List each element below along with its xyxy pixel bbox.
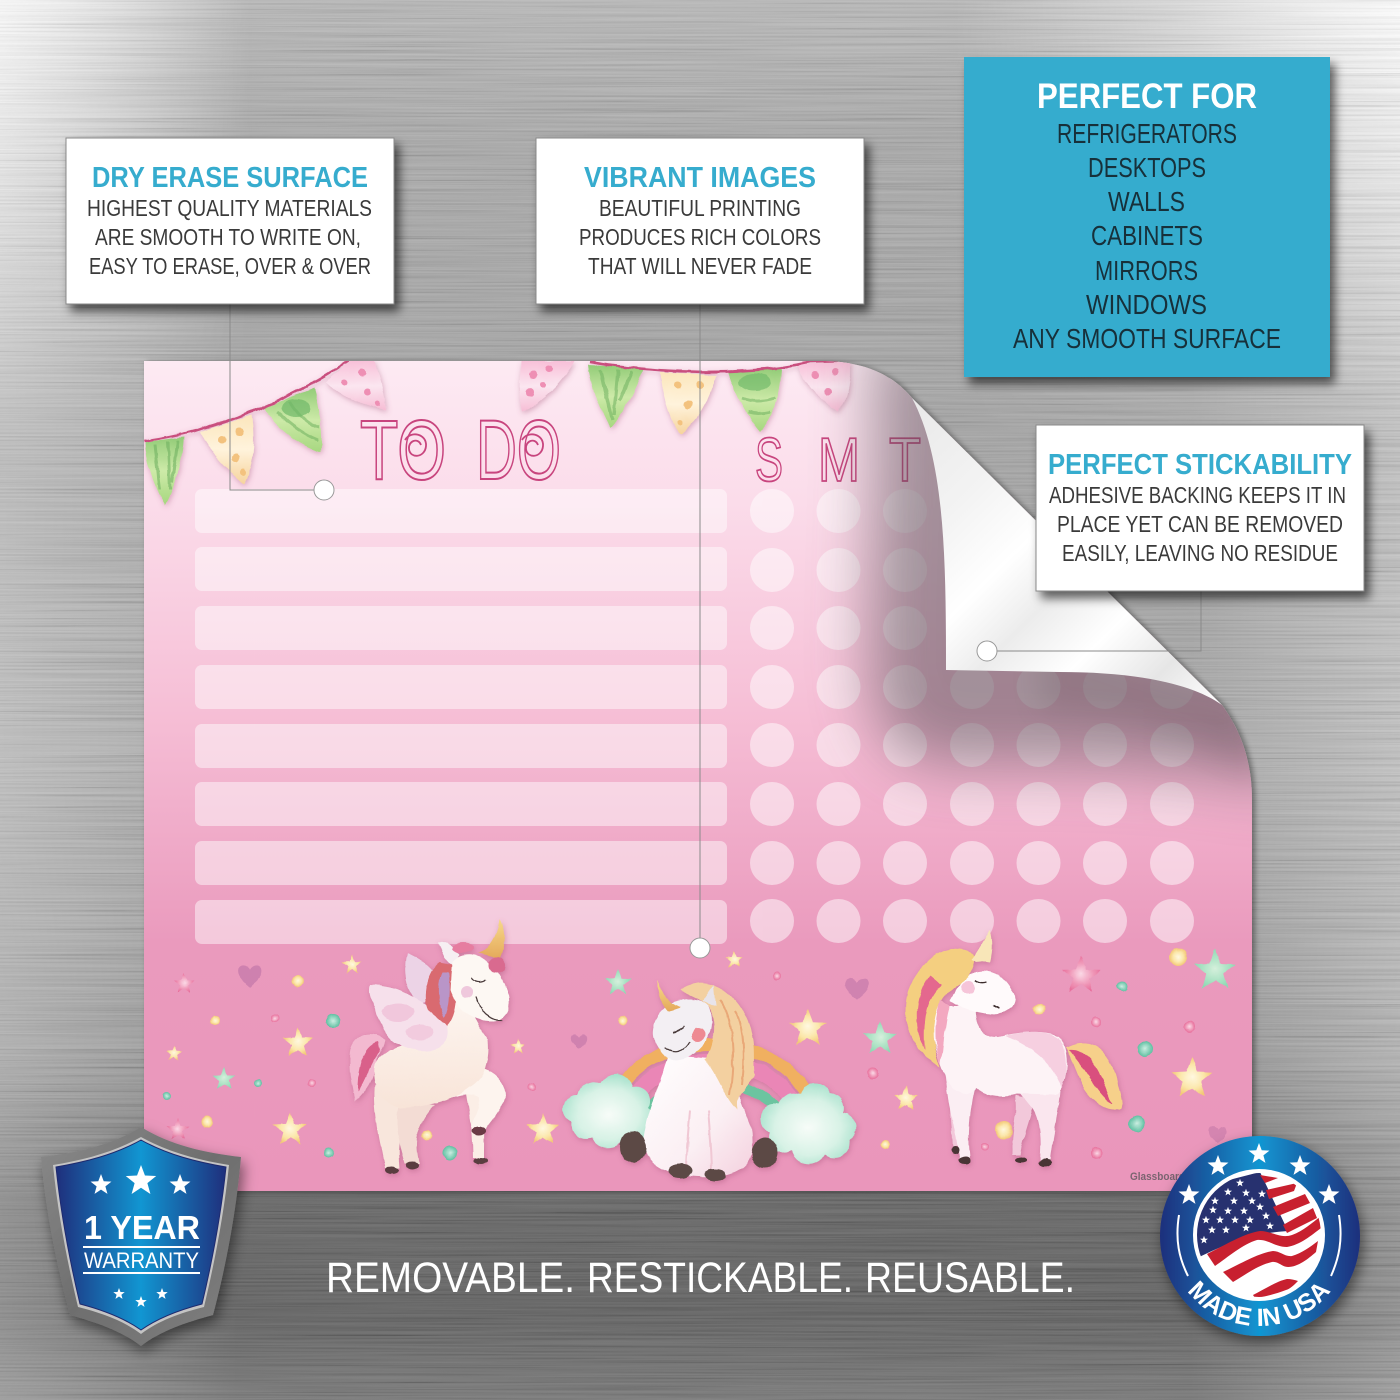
weekday headers: S bbox=[755, 426, 783, 495]
horn bbox=[657, 980, 680, 1012]
rim stars bbox=[1179, 1143, 1339, 1204]
callout body bbox=[579, 195, 821, 279]
callout body bbox=[87, 195, 372, 279]
unicorn: sitting with rainbow bbox=[563, 980, 856, 1181]
callout body: PLACE YET CAN BE REMOVED bbox=[1057, 511, 1343, 537]
near wing bbox=[369, 985, 448, 1051]
rim arcs bbox=[1177, 1215, 1341, 1276]
weekday headers bbox=[755, 426, 921, 495]
tagline: REMOVABLE. bbox=[326, 1254, 575, 1302]
legs bbox=[950, 1090, 958, 1148]
marker dot bbox=[690, 938, 710, 958]
tagline: REUSABLE. bbox=[865, 1254, 1075, 1302]
face bbox=[961, 981, 975, 995]
far wing bbox=[405, 953, 442, 1005]
horn bbox=[972, 930, 992, 963]
panel: perfect for bbox=[964, 57, 1330, 377]
badge: made in usa bbox=[1156, 1133, 1371, 1350]
unicorn: winged bbox=[349, 920, 510, 1174]
tagline: RESTICKABLE. bbox=[587, 1254, 853, 1302]
body and neck bbox=[374, 980, 488, 1108]
warranty text: WARRANTY bbox=[84, 1248, 199, 1273]
leader line: vibrant images bbox=[699, 304, 701, 948]
warranty text: 1 YEAR bbox=[84, 1209, 200, 1246]
surface list: WALLS bbox=[1108, 186, 1185, 217]
mane bbox=[425, 962, 457, 1026]
head bbox=[950, 971, 1015, 1014]
ear bbox=[703, 985, 716, 1007]
callout body: THAT WILL NEVER FADE bbox=[588, 253, 812, 279]
face bbox=[461, 986, 473, 998]
marker dot bbox=[314, 480, 334, 500]
curved label path bbox=[1168, 1235, 1350, 1326]
bunting banners bbox=[144, 361, 850, 505]
mane bbox=[906, 949, 975, 1067]
body bbox=[644, 1055, 753, 1177]
callout heading: VIBRANT IMAGES bbox=[584, 162, 816, 194]
shield silver edge bbox=[53, 1137, 229, 1334]
callout body: PRODUCES RICH COLORS bbox=[579, 224, 821, 250]
callout body bbox=[1049, 482, 1346, 566]
leader line: stickability bbox=[987, 591, 1201, 651]
head bbox=[450, 955, 510, 1021]
left cloud bbox=[563, 1074, 654, 1148]
heading: to do: TO bbox=[360, 403, 446, 497]
callout body: ARE SMOOTH TO WRITE ON, bbox=[95, 224, 361, 250]
surface list: DESKTOPS bbox=[1088, 152, 1206, 183]
tail bbox=[349, 1034, 386, 1101]
callout heading: DRY ERASE SURFACE bbox=[92, 162, 368, 194]
weekday headers: M bbox=[818, 426, 860, 495]
marker dot bbox=[977, 641, 997, 661]
sheet base bbox=[144, 361, 1252, 1191]
surface list: ANY SMOOTH SURFACE bbox=[1013, 323, 1281, 354]
hooves bbox=[620, 1131, 646, 1163]
surface list: MIRRORS bbox=[1095, 255, 1198, 286]
hooves bbox=[959, 1156, 971, 1164]
surface list bbox=[1013, 118, 1281, 354]
maker mark: Glassboard bbox=[1130, 1171, 1185, 1183]
shield frame bbox=[41, 1127, 241, 1346]
hooves bbox=[385, 1166, 399, 1174]
body and neck bbox=[932, 1005, 1067, 1096]
to do rows bbox=[195, 489, 727, 944]
peel shadow bbox=[870, 340, 1290, 790]
badge disc bbox=[1160, 1136, 1360, 1336]
surface list: WINDOWS bbox=[1086, 289, 1207, 320]
callout body: EASY TO ERASE, OVER & OVER bbox=[89, 253, 371, 279]
callout body: HIGHEST QUALITY MATERIALS bbox=[87, 195, 372, 221]
flag disc bbox=[1193, 1169, 1325, 1301]
badge: 1 year warranty bbox=[41, 1127, 241, 1346]
horn bbox=[478, 920, 504, 958]
checkbox circles bbox=[750, 489, 1194, 943]
callout: dry erase surface bbox=[66, 138, 394, 304]
shield stars bbox=[91, 1165, 190, 1307]
right cloud bbox=[760, 1083, 856, 1164]
weekday headers: T bbox=[889, 426, 921, 495]
unicorn: standing bbox=[906, 930, 1122, 1167]
forelock bbox=[452, 943, 474, 953]
shield blue face bbox=[56, 1140, 226, 1330]
warranty text bbox=[83, 1209, 200, 1274]
callout: perfect stickability bbox=[1036, 425, 1364, 591]
rainbow bbox=[622, 1045, 805, 1092]
scattered stars, dots and hearts bbox=[163, 948, 1236, 1160]
face bbox=[691, 1028, 705, 1042]
mane bbox=[680, 983, 755, 1110]
surface list: CABINETS bbox=[1091, 220, 1203, 251]
legs bbox=[374, 1085, 418, 1168]
callout body: EASILY, LEAVING NO RESIDUE bbox=[1062, 540, 1338, 566]
waving flag bbox=[1190, 1172, 1321, 1298]
callout heading: PERFECT STICKABILITY bbox=[1048, 449, 1352, 481]
heading: to do bbox=[360, 403, 561, 497]
ear bbox=[438, 942, 460, 965]
peeled corner bbox=[912, 398, 1222, 705]
surface list: REFRIGERATORS bbox=[1057, 118, 1237, 149]
magnetic sheet bbox=[144, 340, 1290, 1191]
callout body: BEAUTIFUL PRINTING bbox=[599, 195, 801, 221]
heading: to do: DO bbox=[476, 403, 561, 497]
made in usa text: MADE IN USA bbox=[1188, 1280, 1331, 1326]
leader line: dry erase bbox=[230, 304, 324, 490]
head bbox=[653, 999, 712, 1060]
callout: vibrant images bbox=[536, 138, 864, 304]
tail bbox=[1066, 1043, 1122, 1110]
tagline bbox=[326, 1254, 1075, 1302]
panel heading: PERFECT FOR bbox=[1037, 77, 1257, 116]
